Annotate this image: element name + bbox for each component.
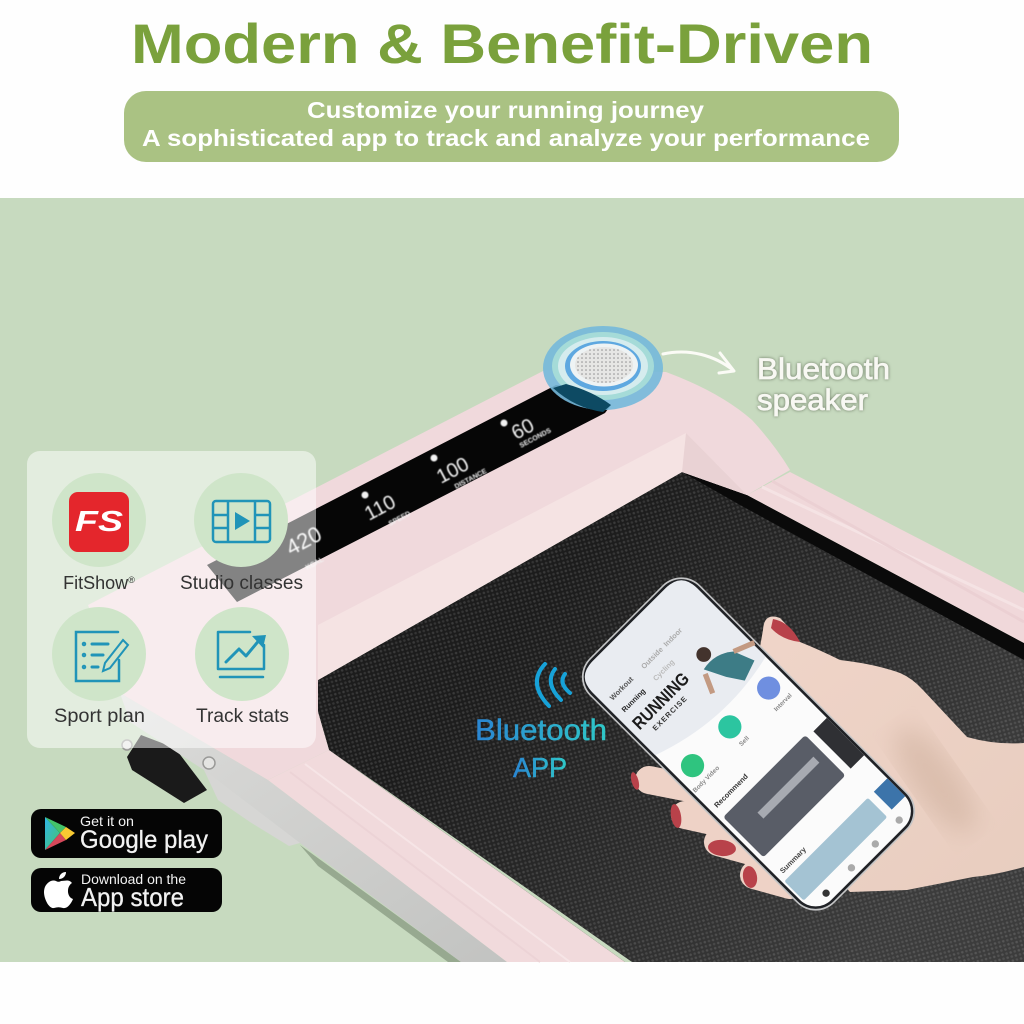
frame shadow on floor bbox=[300, 845, 461, 962]
console inner ramp bbox=[682, 433, 747, 495]
palm and thumb bbox=[740, 616, 1024, 892]
summary label: Summary bbox=[778, 844, 809, 875]
app round icons bbox=[675, 672, 786, 782]
belt edge shadow near right rail bbox=[682, 472, 1024, 660]
display strip bbox=[207, 385, 611, 602]
feature: FitShow bbox=[52, 473, 146, 593]
bluetooth app label: APP bbox=[513, 752, 567, 783]
display readouts: 420 bbox=[282, 521, 326, 560]
badge: App store: App store bbox=[81, 882, 184, 912]
green photo backdrop bbox=[0, 198, 1024, 962]
bluetooth speaker label: Bluetooth bbox=[757, 353, 890, 386]
app header bbox=[577, 572, 771, 766]
badge: App store bbox=[31, 868, 222, 912]
blue photo strip bbox=[784, 798, 887, 901]
runner image bbox=[684, 618, 769, 703]
console body bbox=[88, 370, 790, 780]
feature: FitShow: FS bbox=[75, 506, 124, 538]
badge: App store: Download on the bbox=[81, 872, 186, 887]
feature: Track stats: Track stats bbox=[196, 706, 289, 727]
app icon labels: Interval bbox=[773, 692, 794, 713]
fingers bbox=[649, 780, 790, 885]
app headline: RUNNING bbox=[628, 669, 693, 733]
bluetooth speaker rings bbox=[543, 326, 663, 412]
feature: FitShow: FitShow bbox=[63, 573, 128, 593]
app tabs: Indoor bbox=[661, 626, 684, 648]
recommended label: Recommend bbox=[712, 772, 750, 810]
bluetooth app label: Bluetooth bbox=[475, 714, 607, 747]
badge: Google play: Google play bbox=[80, 826, 208, 854]
display readouts: 60 bbox=[508, 415, 538, 444]
right side rail bbox=[747, 472, 1024, 643]
belt light falloff bbox=[318, 472, 1024, 962]
feature: Sport plan: Sport plan bbox=[54, 706, 145, 727]
display readouts: 110 bbox=[361, 491, 400, 525]
app icon labels bbox=[692, 692, 794, 794]
subtitle pill: Customize your running journey bbox=[307, 97, 704, 123]
cropped dark card bbox=[813, 718, 864, 769]
display readouts: DISTANCE bbox=[454, 468, 488, 491]
icon: apple bbox=[44, 872, 73, 908]
badge: Google play: Get it on bbox=[80, 813, 134, 829]
subtitle pill bbox=[124, 91, 899, 162]
app tabs: Cycling bbox=[651, 657, 677, 683]
feature: Sport plan bbox=[52, 607, 146, 727]
bluetooth app callout bbox=[475, 664, 607, 783]
smartphone bbox=[571, 566, 926, 922]
display readouts: 100 bbox=[433, 453, 473, 488]
foot block bbox=[127, 735, 207, 803]
app icon labels: Sell bbox=[738, 735, 751, 748]
arrow to speaker label bbox=[663, 352, 734, 373]
app tabs: Running bbox=[620, 686, 648, 714]
icon: play triangle bbox=[45, 817, 75, 850]
feature: Studio classes: Studio classes bbox=[180, 573, 303, 594]
feature: FitShow: ® bbox=[128, 575, 135, 585]
console front lip bbox=[318, 433, 747, 680]
app tabs bbox=[608, 626, 696, 714]
belt edge shadow near left rail bbox=[322, 745, 625, 962]
silver side frame bbox=[120, 693, 507, 962]
panel: app features bbox=[27, 451, 316, 748]
palm shading bbox=[881, 717, 989, 843]
silver bracket bbox=[204, 770, 300, 846]
feature: Track stats bbox=[195, 607, 289, 727]
hand behind phone bbox=[629, 616, 1024, 892]
blue card bbox=[874, 778, 905, 810]
title: Modern & Benefit-Driven bbox=[131, 12, 873, 75]
display readouts: KCAL bbox=[305, 556, 326, 572]
bluetooth waves icon bbox=[537, 664, 570, 706]
bluetooth speaker label bbox=[757, 353, 890, 417]
left side rail bbox=[268, 750, 625, 962]
app headline: EXERCISE bbox=[651, 694, 689, 732]
badge: Google play bbox=[31, 809, 222, 858]
app icon labels: Body Video bbox=[692, 765, 721, 794]
subtitle pill: A sophisticated app to track and analyze your performance bbox=[142, 125, 870, 151]
feature: Studio classes bbox=[180, 473, 303, 594]
frame bolts bbox=[122, 740, 244, 769]
bluetooth speaker label: speaker bbox=[757, 384, 868, 417]
display readouts bbox=[282, 415, 553, 572]
treadmill bbox=[88, 370, 1024, 962]
app tabs: Outside bbox=[639, 645, 665, 671]
fingernails bbox=[629, 619, 800, 889]
bluetooth app label bbox=[475, 714, 607, 783]
running belt bbox=[318, 472, 1024, 962]
bottom nav bbox=[821, 815, 904, 898]
app tabs: Workout bbox=[608, 674, 636, 702]
display readouts: SECONDS bbox=[519, 427, 553, 450]
display readouts: SPEED bbox=[388, 510, 412, 528]
dark photo card bbox=[723, 735, 845, 857]
display overlap in ring bbox=[553, 384, 611, 412]
